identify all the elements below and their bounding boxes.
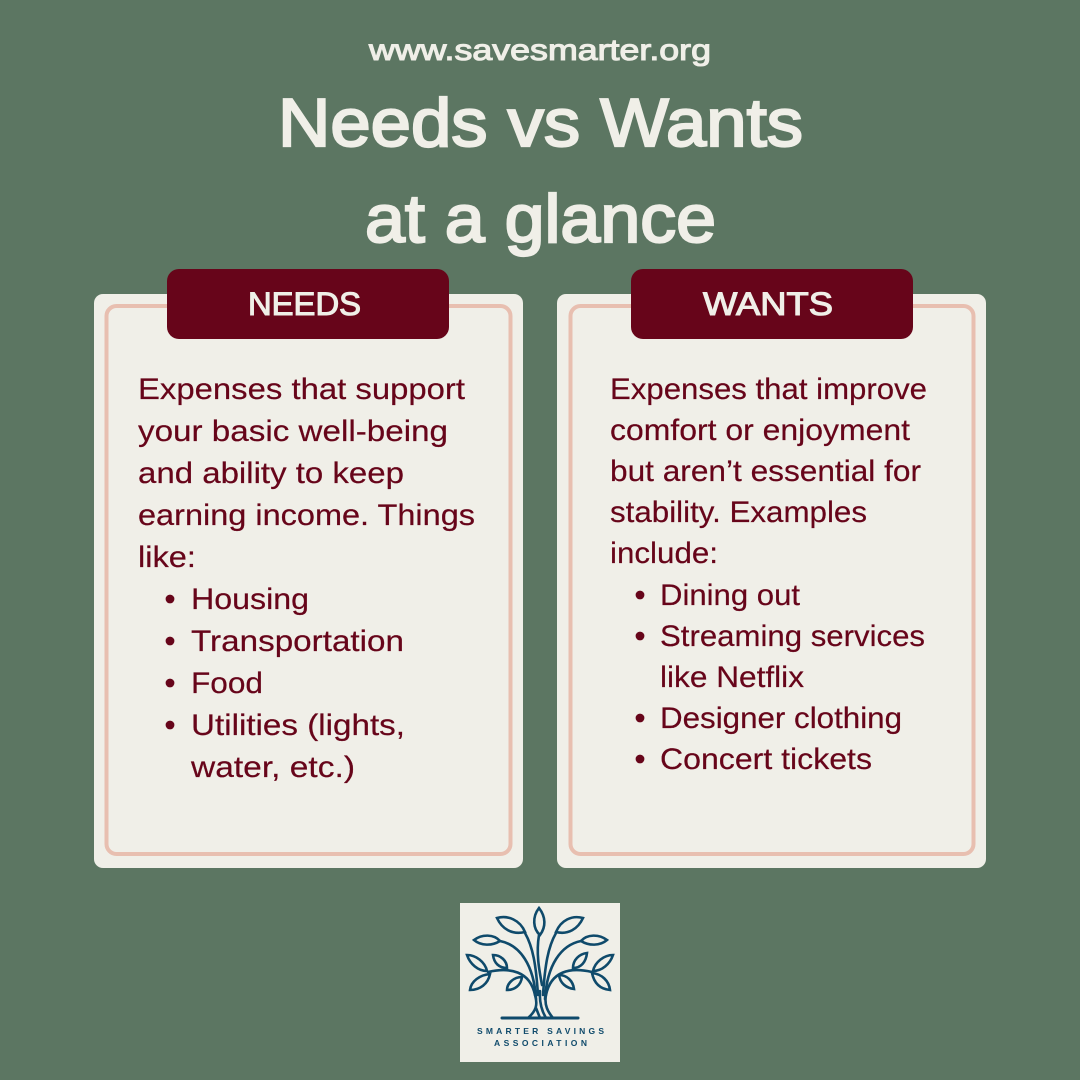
wants list: Dining out — [660, 579, 801, 612]
needs list — [166, 583, 405, 784]
needs tab — [167, 269, 449, 339]
wants description: Expenses that improve — [610, 373, 927, 406]
wants card inner border — [570, 306, 974, 854]
title: at a glance — [365, 181, 716, 257]
wants description: but aren’t essential for — [610, 455, 921, 488]
panel: wants — [557, 269, 986, 868]
needs list: Transportation — [191, 625, 404, 658]
needs description: like: — [138, 541, 196, 574]
logo wordmark: ASSOCIATION — [494, 1038, 587, 1048]
wants description — [610, 373, 927, 570]
needs list: Food — [191, 667, 263, 700]
title: Needs vs Wants — [278, 85, 803, 161]
logo wordmark — [477, 1026, 604, 1048]
wants description: stability. Examples — [610, 496, 867, 529]
wants list: like Netflix — [660, 661, 804, 694]
wants list — [636, 579, 925, 776]
needs tab: NEEDS — [248, 286, 361, 322]
wants description: include: — [610, 537, 718, 570]
wants list: Designer clothing — [660, 702, 902, 735]
needs list: Housing — [191, 583, 309, 616]
website url: www.savesmarter.org — [368, 34, 711, 67]
wants tab — [631, 269, 913, 339]
wants card background — [557, 294, 986, 868]
needs list: Utilities (lights, — [191, 709, 405, 742]
needs description: and ability to keep — [138, 457, 404, 490]
logo wordmark: SMARTER SAVINGS — [477, 1026, 604, 1036]
icon: tree — [467, 908, 613, 1018]
needs card background — [94, 294, 523, 868]
panel: needs — [94, 269, 523, 868]
needs list: water, etc.) — [190, 751, 355, 784]
wants tab: WANTS — [703, 286, 833, 322]
wants description: comfort or enjoyment — [610, 414, 911, 447]
wants list: Concert tickets — [660, 743, 872, 776]
needs description: your basic well-being — [138, 415, 448, 448]
needs description: earning income. Things — [138, 499, 475, 532]
needs description: Expenses that support — [138, 373, 466, 406]
needs card inner border — [106, 306, 510, 854]
wants list: Streaming services — [660, 620, 925, 653]
needs description — [138, 373, 475, 574]
title — [278, 85, 803, 257]
logo: smarter savings association — [460, 903, 620, 1062]
